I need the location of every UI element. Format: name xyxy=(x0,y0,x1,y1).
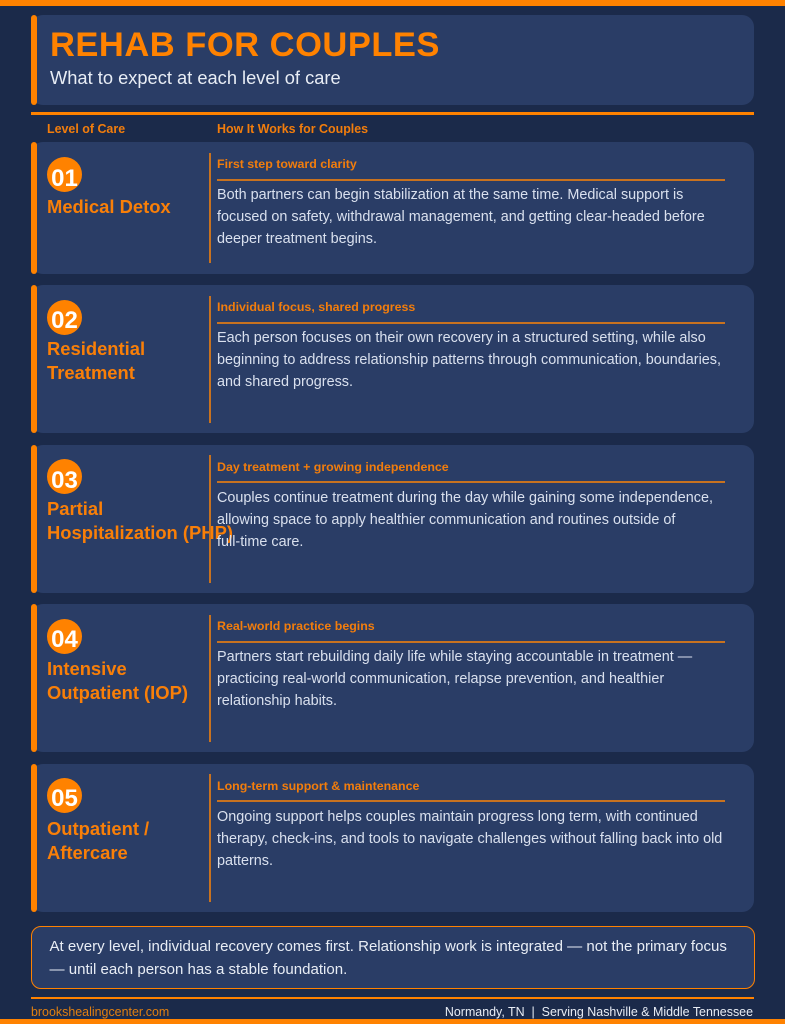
subheading: Long-term support & maintenance xyxy=(217,779,419,793)
column divider xyxy=(209,296,211,423)
level name: Treatment xyxy=(47,362,135,383)
panel: 03 partial hospitalization xyxy=(31,445,754,593)
number badge 05 xyxy=(47,778,82,813)
description xyxy=(217,809,722,869)
level name: Residential xyxy=(47,338,145,359)
subheading: Real-world practice begins xyxy=(217,619,375,633)
description: Ongoing support helps couples maintain progress long term, with continued xyxy=(217,809,698,825)
level name: Outpatient / xyxy=(47,818,149,839)
level name: Intensive xyxy=(47,658,127,679)
panel: 04 intensive outpatient xyxy=(31,604,754,752)
level name xyxy=(47,338,145,383)
panel: 02 residential treatment xyxy=(31,285,754,433)
subheading: First step toward clarity xyxy=(217,157,357,171)
description: Partners start rebuilding daily life while staying accountable in treatment — xyxy=(217,649,692,665)
callout xyxy=(31,926,755,989)
number badge 03 xyxy=(47,459,82,494)
description xyxy=(217,649,692,709)
level name xyxy=(47,658,188,703)
subheading rule xyxy=(217,322,725,324)
level name xyxy=(47,818,149,863)
description: Each person focuses on their own recovery in a structured setting, while also xyxy=(217,330,706,346)
column heading: how it works: How It Works for Couples xyxy=(217,122,368,136)
header panel xyxy=(31,15,754,105)
callout text: At every level, individual recovery comes first. Relationship work is integrated — not the primary focus xyxy=(50,938,727,955)
number badge 03: 03 xyxy=(51,467,78,494)
number badge 04 xyxy=(47,619,82,654)
subheading rule xyxy=(217,800,725,802)
panel: 01 medical detox xyxy=(31,142,754,274)
footer location: Normandy, TN | Serving Nashville & Middle Tennessee xyxy=(445,1005,753,1019)
description: practicing real-world communication, relapse prevention, and healthier xyxy=(217,671,664,687)
number badge 05: 05 xyxy=(51,785,78,812)
description xyxy=(217,187,705,247)
column divider xyxy=(209,152,211,262)
level name xyxy=(47,498,233,543)
description: allowing space to apply healthier communication and routines outside of xyxy=(217,512,675,528)
column divider xyxy=(209,614,211,742)
accent bar xyxy=(31,142,37,274)
top bar xyxy=(0,0,785,6)
number badge 02 xyxy=(47,300,82,335)
description: full-time care. xyxy=(217,534,303,550)
level name: Hospitalization (PHP) xyxy=(47,522,233,543)
subheading rule xyxy=(217,481,725,483)
header rule xyxy=(31,112,754,115)
subtitle: What to expect at each level of care xyxy=(50,67,341,88)
column divider xyxy=(209,455,211,583)
description: beginning to address relationship patterns through communication, boundaries, xyxy=(217,352,721,368)
panel: 05 outpatient aftercare xyxy=(31,764,754,912)
footer rule xyxy=(31,997,754,999)
number badge 04: 04 xyxy=(51,626,78,653)
callout text xyxy=(50,938,727,978)
level name: Partial xyxy=(47,498,103,519)
level name: Medical Detox xyxy=(47,196,171,217)
number badge 01 xyxy=(47,157,82,192)
description: patterns. xyxy=(217,853,273,869)
subheading rule xyxy=(217,179,725,181)
accent bar xyxy=(31,285,37,433)
callout text: — until each person has a stable foundation. xyxy=(50,961,347,978)
level name: Aftercare xyxy=(47,842,128,863)
level name: Outpatient (IOP) xyxy=(47,682,188,703)
accent bar xyxy=(31,764,37,912)
description xyxy=(217,330,721,390)
bottom bar xyxy=(0,1019,785,1024)
description: therapy, check-ins, and tools to navigate challenges without falling back into old xyxy=(217,831,722,847)
description: focused on safety, withdrawal management, and getting clear-headed before xyxy=(217,209,705,225)
column divider xyxy=(209,774,211,902)
column heading: level of care: Level of Care xyxy=(47,122,125,136)
number badge 01: 01 xyxy=(51,165,78,192)
accent bar xyxy=(31,15,37,105)
description: and shared progress. xyxy=(217,374,353,390)
footer website: brookshealingcenter.com xyxy=(31,1005,169,1019)
description: deeper treatment begins. xyxy=(217,231,377,247)
description: Both partners can begin stabilization at the same time. Medical support is xyxy=(217,187,683,203)
description: Couples continue treatment during the day while gaining some independence, xyxy=(217,490,713,506)
description: relationship habits. xyxy=(217,693,337,709)
subheading: Individual focus, shared progress xyxy=(217,300,415,314)
subheading: Day treatment + growing independence xyxy=(217,460,449,474)
accent bar xyxy=(31,445,37,593)
number badge 02: 02 xyxy=(51,307,78,334)
title: REHAB FOR COUPLES xyxy=(50,26,440,64)
subheading rule xyxy=(217,641,725,643)
description xyxy=(217,490,713,550)
accent bar xyxy=(31,604,37,752)
